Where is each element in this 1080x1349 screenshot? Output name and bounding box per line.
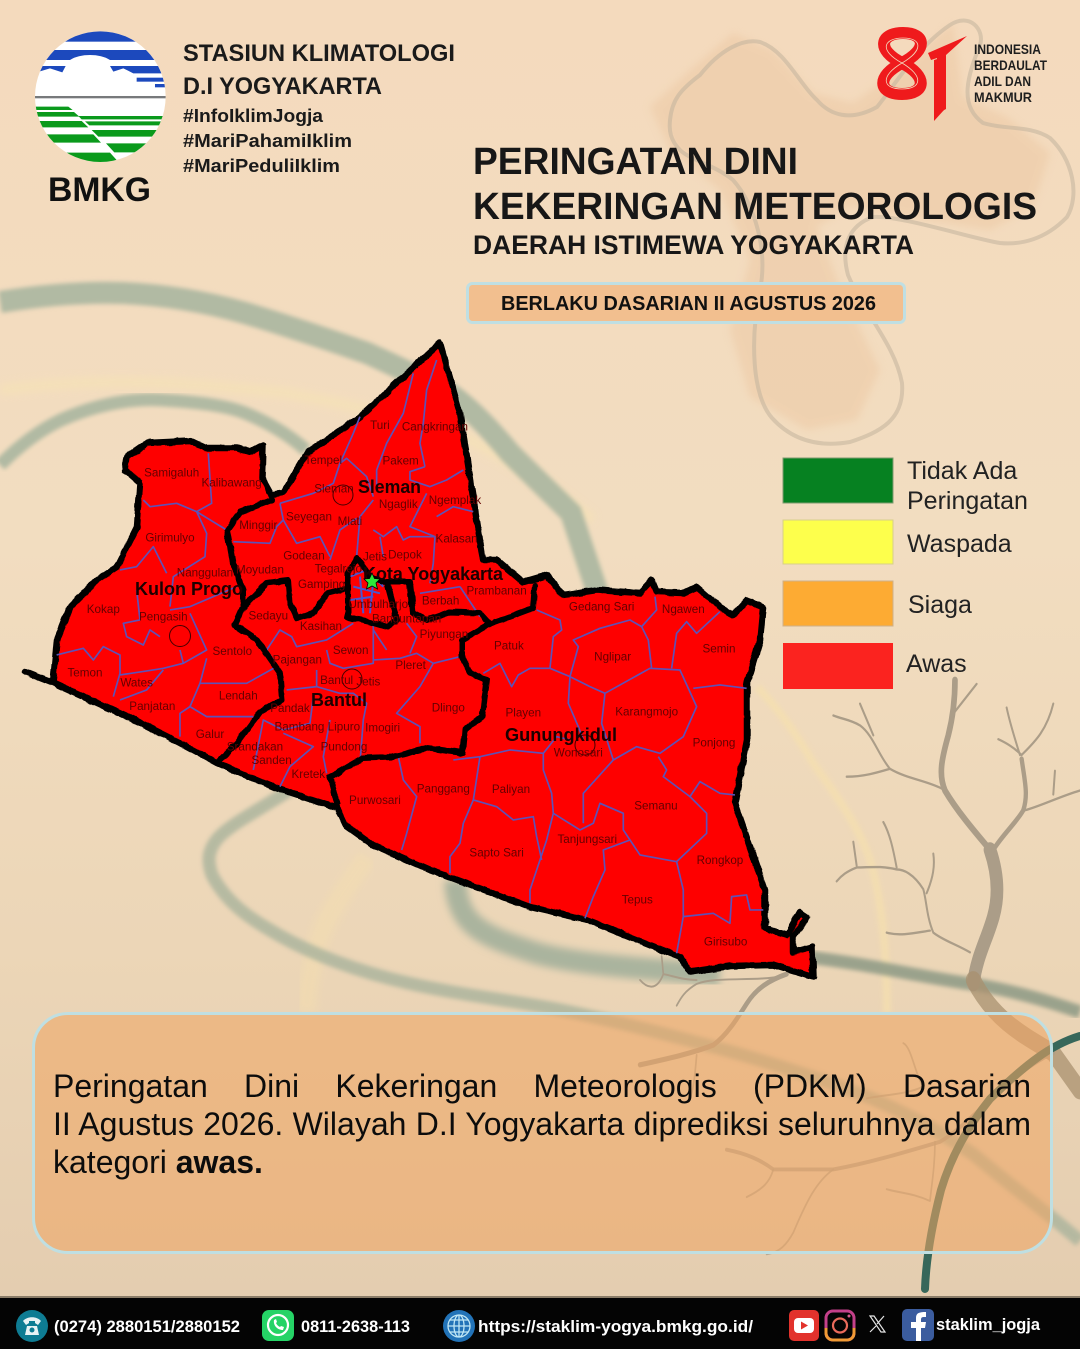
map labels: districts: Seyegan bbox=[286, 511, 332, 524]
map labels: districts: Cangkringan bbox=[402, 421, 468, 434]
icon: instagram bbox=[826, 1311, 854, 1340]
map labels: regencies: Bantul bbox=[311, 690, 367, 710]
heading: station name and hashtags: STASIUN KLIMATOLOGI bbox=[183, 40, 455, 67]
map labels: Gunungkidul districts: Wonosari bbox=[554, 746, 603, 759]
text: Indonesia Berdaulat slogan: ADIL DAN bbox=[974, 73, 1031, 89]
map labels: Gunungkidul districts: Karangmojo bbox=[615, 706, 678, 719]
map labels: districts: Banguntapan bbox=[372, 612, 441, 625]
map labels: Gunungkidul districts: Ngawen bbox=[662, 603, 705, 616]
map labels: districts: Tegalrejo bbox=[315, 563, 362, 576]
legend: Tidak Ada bbox=[907, 457, 1017, 485]
map labels: districts: Tempel bbox=[305, 454, 342, 467]
icon: X bbox=[870, 1316, 885, 1332]
map labels: districts: Panjatan bbox=[129, 700, 175, 713]
map labels: districts: Pandak bbox=[270, 702, 310, 715]
map labels: Gunungkidul districts: Ponjong bbox=[693, 736, 735, 749]
icon: 81 anniversary logo bbox=[883, 33, 967, 121]
map labels: Gunungkidul districts: Tepus bbox=[622, 893, 653, 906]
map labels: districts: Purwosari bbox=[349, 794, 401, 807]
map: D.I Yogyakarta drought warning bbox=[25, 343, 813, 977]
badge: validity period bbox=[468, 284, 904, 322]
map labels: districts: Playen bbox=[505, 707, 541, 720]
map labels: regencies: Kota Yogyakarta bbox=[363, 564, 504, 584]
footer bar bbox=[0, 1296, 1080, 1349]
map labels: districts: Kretek bbox=[291, 768, 325, 781]
heading: station name and hashtags: #MariPahamiIklim bbox=[183, 131, 352, 151]
map labels: districts: Imogiri bbox=[365, 721, 400, 734]
map labels: districts: Kokap bbox=[87, 603, 120, 616]
title: KEKERINGAN METEOROLOGIS bbox=[473, 186, 1037, 228]
district boundary lines bbox=[57, 360, 763, 953]
map labels: districts: Sentolo bbox=[213, 645, 252, 658]
map labels: regencies bbox=[135, 477, 617, 745]
map labels: Gunungkidul districts: Tanjungsari bbox=[557, 833, 617, 846]
map labels: Gunungkidul districts: Gedang Sari bbox=[569, 601, 634, 614]
map labels: districts: Berbah bbox=[422, 595, 459, 608]
heading: station name and hashtags: #MariPeduliIklim bbox=[183, 156, 340, 176]
map area fill and coast outline bbox=[25, 343, 813, 977]
map labels: districts: Pajangan bbox=[273, 653, 322, 666]
map labels: districts: Umbulharjo bbox=[348, 598, 408, 611]
icon: provincial capital star bbox=[364, 573, 380, 589]
map labels: Gunungkidul districts: Semanu bbox=[634, 800, 678, 813]
map labels: districts: Lendah bbox=[219, 690, 258, 703]
map labels: districts: Jetis bbox=[356, 676, 380, 689]
text: whatsapp number: 0811-2638-113 bbox=[301, 1318, 410, 1336]
map labels: districts: Sanden bbox=[252, 754, 292, 767]
map labels: Gunungkidul districts: Nglipar bbox=[594, 651, 631, 664]
map labels: districts: Samigaluh bbox=[144, 466, 199, 479]
map labels: districts: Nanggulan bbox=[177, 567, 233, 580]
icon: district capital circles bbox=[170, 485, 595, 755]
text: BMKG wordmark: BMKG bbox=[48, 171, 151, 209]
text: Indonesia Berdaulat slogan: INDONESIA bbox=[974, 41, 1041, 57]
map labels: districts: Ngemplak bbox=[429, 494, 481, 507]
text: Indonesia Berdaulat slogan: MAKMUR bbox=[974, 89, 1032, 105]
title bbox=[473, 141, 1037, 260]
map labels: Gunungkidul districts bbox=[469, 601, 747, 949]
text: Indonesia Berdaulat slogan bbox=[974, 41, 1047, 105]
map labels: districts: Wates bbox=[120, 677, 153, 690]
icon: bare tree branches bbox=[640, 680, 1080, 1254]
text: website: https://staklim-yogya.bmkg.go.id/ bbox=[478, 1317, 753, 1336]
text block: description bbox=[53, 1068, 1031, 1180]
icon: youtube bbox=[789, 1310, 819, 1341]
map labels: districts: Dlingo bbox=[432, 701, 465, 714]
text block: description: kategori awas. bbox=[53, 1144, 263, 1180]
map labels: Gunungkidul districts: Sapto Sari bbox=[469, 847, 524, 860]
map labels: districts: Sleman bbox=[314, 482, 354, 495]
map labels: Gunungkidul districts: Semin bbox=[702, 642, 735, 655]
badge: validity period: BERLAKU DASARIAN II AGUSTUS 2026 bbox=[501, 292, 876, 315]
map labels: districts: Sewon bbox=[333, 644, 368, 657]
map labels: districts: Bantul bbox=[320, 674, 353, 687]
title: DAERAH ISTIMEWA YOGYAKARTA bbox=[473, 230, 914, 260]
map labels: districts: Panggang bbox=[417, 782, 470, 795]
map labels: districts: Minggir bbox=[239, 519, 278, 532]
icon: green brush stroke bbox=[925, 1036, 1080, 1289]
text block: description: II Agustus 2026. Wilayah D.I Yogyakarta diprediksi seluruhnya dalam bbox=[53, 1106, 1031, 1142]
legend: Awas bbox=[906, 650, 967, 678]
map labels: Gunungkidul districts: Girisubo bbox=[704, 936, 747, 949]
map labels: districts: Jetis bbox=[363, 551, 387, 564]
map labels: districts: Sedayu bbox=[249, 610, 288, 623]
heading: station name and hashtags: #InfoIklimJogja bbox=[183, 106, 324, 126]
map labels: Gunungkidul districts: Rongkop bbox=[697, 854, 743, 867]
text: social handle: staklim_jogja bbox=[936, 1316, 1041, 1334]
map labels: regencies: Sleman bbox=[358, 477, 421, 497]
map labels: districts: Galur bbox=[196, 728, 224, 741]
map labels: districts: Paliyan bbox=[492, 783, 530, 796]
icon: facebook bbox=[902, 1309, 934, 1341]
map labels: regencies: Gunungkidul bbox=[505, 725, 617, 745]
map labels: districts: Temon bbox=[67, 667, 102, 680]
map labels: districts: Kalasan bbox=[436, 532, 478, 545]
map labels: districts: Bambang Lipuro bbox=[275, 721, 360, 734]
map labels: districts: Turi bbox=[370, 419, 390, 432]
legend bbox=[783, 457, 1028, 689]
map labels: districts: Patuk bbox=[494, 639, 524, 652]
map labels: districts: Srandakan bbox=[227, 741, 283, 754]
panel: description box background bbox=[32, 1012, 1053, 1254]
map labels: districts: Pundong bbox=[321, 741, 367, 754]
map labels: districts: Pleret bbox=[395, 659, 427, 672]
map labels: districts: Mlati bbox=[338, 515, 362, 528]
map labels: districts: Pakem bbox=[382, 455, 419, 468]
map labels: districts: Girimulyo bbox=[145, 531, 195, 544]
title: PERINGATAN DINI bbox=[473, 141, 798, 183]
map labels: districts: Piyungan bbox=[420, 628, 468, 641]
heading: station name and hashtags: D.I YOGYAKARTA bbox=[183, 73, 382, 100]
icon: telephone bbox=[16, 1310, 48, 1342]
map labels: districts: Ngaglik bbox=[379, 498, 418, 511]
map labels: districts: Depok bbox=[388, 548, 422, 561]
text: Indonesia Berdaulat slogan: BERDAULAT bbox=[974, 57, 1047, 73]
map labels: regencies: Kulon Progo bbox=[135, 579, 243, 599]
map labels: districts: Moyudan bbox=[236, 563, 284, 576]
heading: station name and hashtags bbox=[183, 40, 455, 176]
regency boundary lines bbox=[217, 500, 535, 803]
icon: BMKG logo bbox=[33, 31, 167, 209]
icon: whatsapp bbox=[262, 1310, 294, 1341]
map labels: districts: Kalibawang bbox=[202, 477, 262, 490]
legend: Siaga bbox=[908, 591, 972, 619]
map labels: districts bbox=[67, 419, 541, 807]
map labels: districts: Prambanan bbox=[466, 585, 527, 598]
legend: Waspada bbox=[907, 530, 1012, 558]
icon: globe bbox=[443, 1310, 475, 1342]
legend: Peringatan bbox=[907, 487, 1028, 515]
map labels: districts: Gamping bbox=[298, 578, 345, 591]
text block: description: Peringatan Dini Kekeringan Meteorologis (PDKM) Dasarian bbox=[53, 1068, 1031, 1104]
map labels: districts: Pengasih bbox=[139, 611, 188, 624]
map labels: districts: Godean bbox=[283, 549, 325, 562]
text: phone number: (0274) 2880151/2880152 bbox=[54, 1318, 240, 1336]
map labels: districts: Kasihan bbox=[300, 620, 342, 633]
